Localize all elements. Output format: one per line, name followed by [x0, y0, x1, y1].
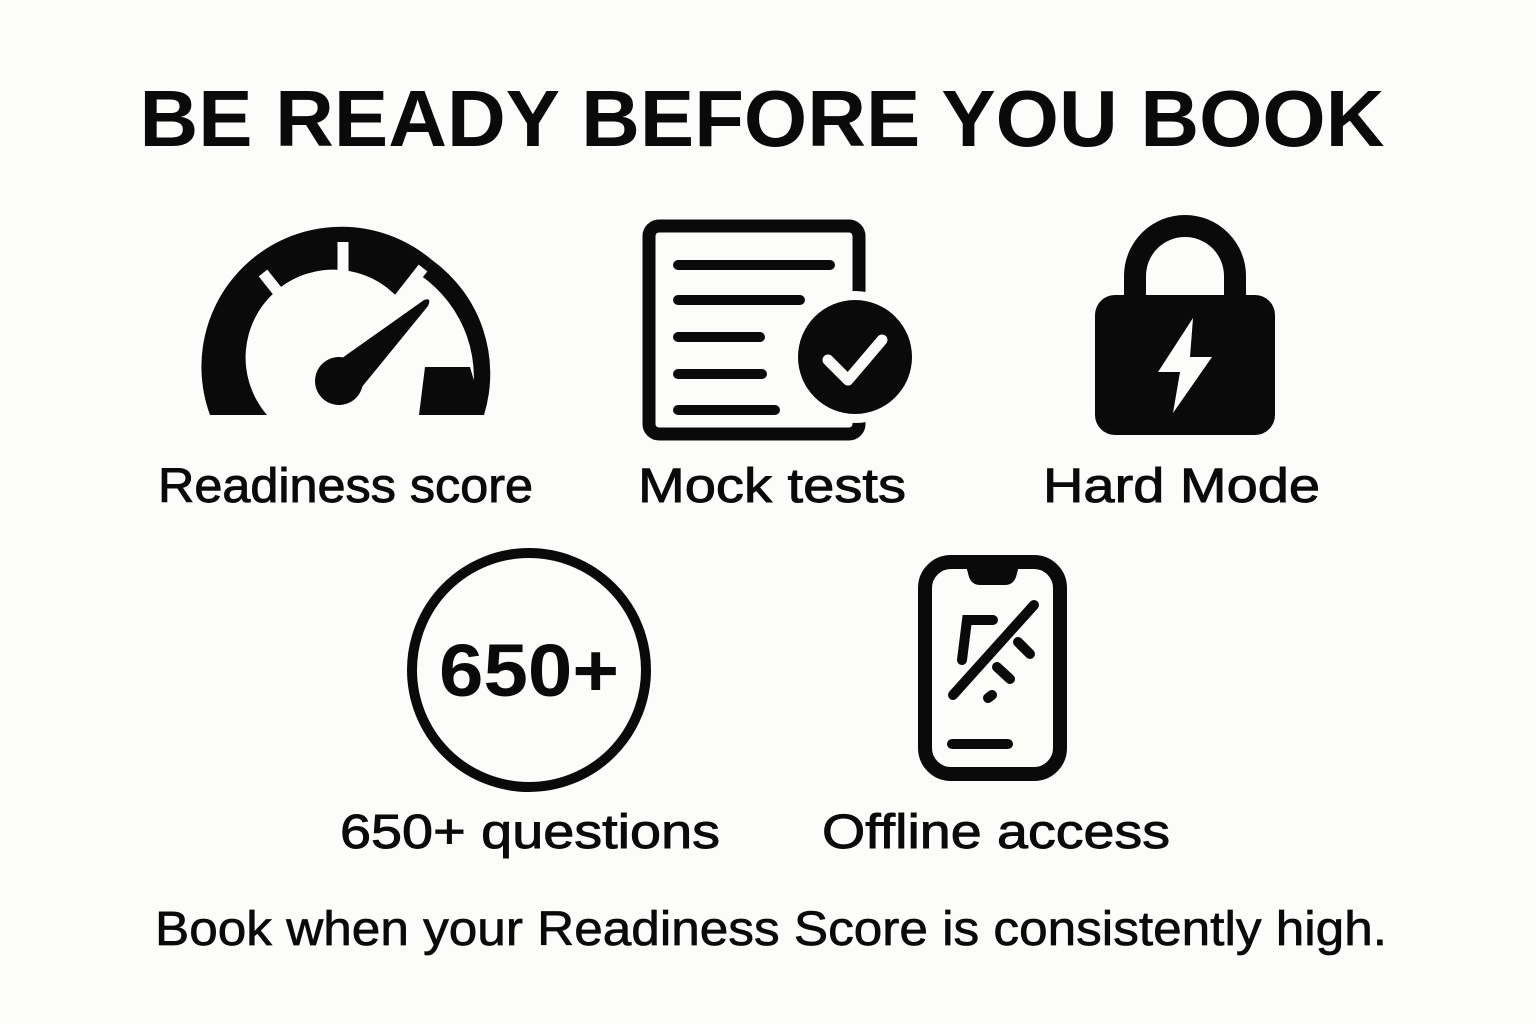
title: BE READY BEFORE YOU BOOK: [140, 74, 1385, 163]
icon: speedometer gauge: [201, 227, 490, 415]
icon: 650+ circle: 650+: [439, 629, 619, 712]
icon: lock with lightning: [1095, 226, 1275, 435]
label: 650+ questions: 650+ questions: [340, 806, 720, 859]
icon: 650+ circle: [412, 553, 646, 787]
label: Hard Mode: Hard Mode: [1043, 460, 1320, 513]
label: Readiness score: Readiness score: [158, 460, 533, 513]
icon: phone offline: [925, 562, 1060, 774]
label: Offline access: Offline access: [822, 806, 1170, 859]
label: Mock tests: Mock tests: [638, 460, 906, 513]
icon: mock test document: [649, 226, 921, 434]
footer text: Book when your Readiness Score is consistently high.: [155, 903, 1387, 956]
